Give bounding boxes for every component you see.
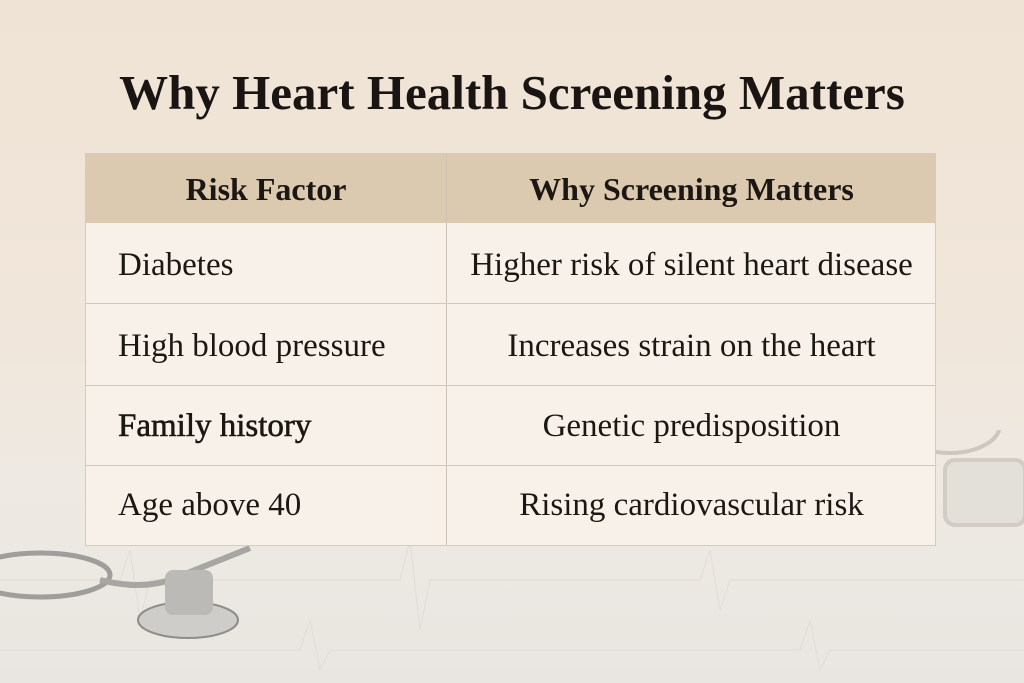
row 2: High blood pressure xyxy=(118,328,386,364)
row 4: Age above 40 xyxy=(118,487,301,523)
row 3: Family history xyxy=(118,408,311,444)
row 2 reason: Increases strain on the heart xyxy=(507,328,876,364)
decorative: ecg paper bottom xyxy=(0,430,1024,670)
title: Why Heart Health Screening Matters xyxy=(119,65,905,120)
table xyxy=(85,153,936,546)
row 3 reason: Genetic predisposition xyxy=(543,408,840,444)
row 1 reason: Higher risk of silent heart disease xyxy=(470,247,913,283)
row 4 reason: Rising cardiovascular risk xyxy=(519,487,864,523)
row 1: Diabetes xyxy=(118,247,233,283)
header: Risk Factor: Risk Factor xyxy=(186,171,346,207)
header: Why Screening Matters: Why Screening Matters xyxy=(529,171,854,207)
icon: stethoscope xyxy=(0,548,250,638)
icon: glasses xyxy=(900,397,1024,525)
